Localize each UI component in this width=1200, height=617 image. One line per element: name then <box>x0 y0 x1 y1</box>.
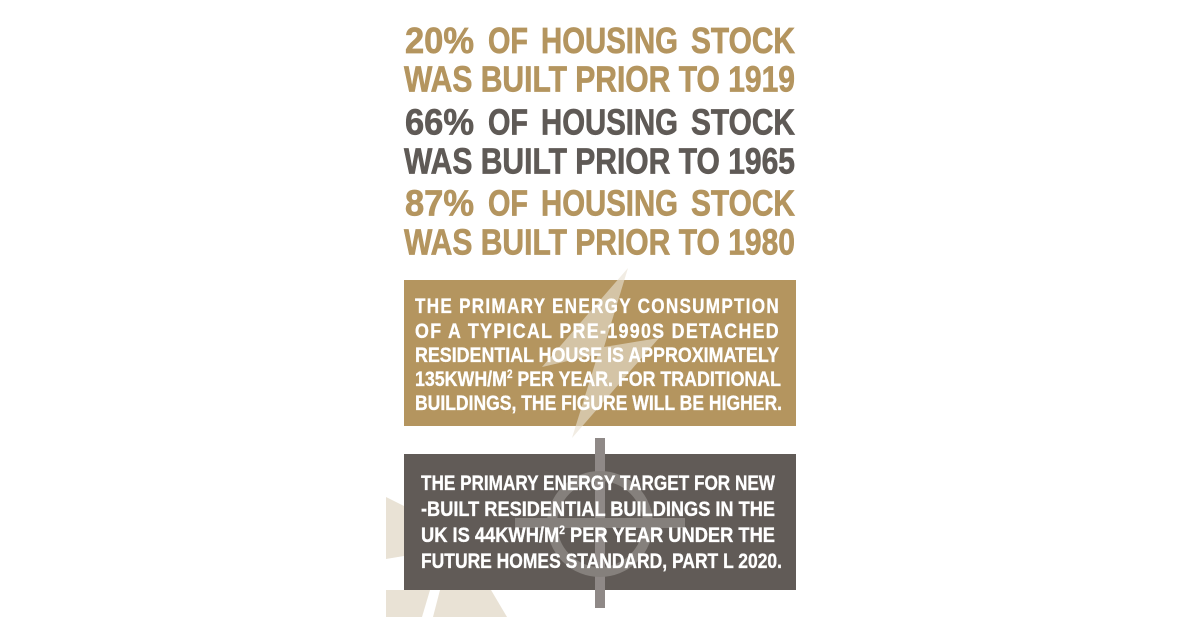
heading: 66% of housing stock <box>404 102 796 182</box>
heading: 20% of housing stock <box>404 20 796 100</box>
heading: 66% of housing stock: OF <box>488 102 528 142</box>
panel: primary energy consumption <box>404 268 796 438</box>
heading: 87% of housing stock: STOCK <box>691 182 796 224</box>
text: consumption statement: 2 <box>507 367 513 381</box>
text: consumption statement: RESIDENTIAL HOUSE IS APPROXIMATELY <box>415 343 779 367</box>
heading: 20% of housing stock: HOUSING <box>541 20 678 61</box>
text: consumption statement <box>415 294 782 415</box>
heading: 66% of housing stock: STOCK <box>691 102 796 142</box>
text: consumption statement: THE PRIMARY ENERGY CONSUMPTION <box>415 294 780 318</box>
heading: 87% of housing stock: 87% <box>405 182 474 224</box>
text: target statement: THE PRIMARY ENERGY TARGET FOR NEW <box>421 471 776 495</box>
heading: 87% of housing stock: WAS BUILT PRIOR TO 1980 <box>404 222 795 262</box>
text: target statement: 2 <box>559 523 565 537</box>
heading: 20% of housing stock: STOCK <box>691 20 796 61</box>
heading: 66% of housing stock: 66% <box>405 102 474 142</box>
graphic: beige house fragment <box>386 497 507 617</box>
text: target statement: -BUILT RESIDENTIAL BUILDINGS IN THE <box>421 497 775 521</box>
heading: 87% of housing stock: OF <box>488 182 528 224</box>
text: target statement <box>421 471 782 573</box>
text: consumption statement: PER YEAR. FOR TRADITIONAL <box>512 367 781 391</box>
text: target statement: PER YEAR UNDER THE <box>565 523 775 547</box>
text: target statement: FUTURE HOMES STANDARD, PART L 2020. <box>421 549 782 573</box>
text: consumption statement: OF A TYPICAL PRE-1990S DETACHED <box>415 319 780 343</box>
heading: 20% of housing stock: WAS BUILT PRIOR TO 1919 <box>404 58 795 100</box>
heading: 66% of housing stock: WAS BUILT PRIOR TO 1965 <box>404 140 795 182</box>
heading: 66% of housing stock: HOUSING <box>541 102 678 142</box>
heading: 20% of housing stock: 20% <box>405 20 474 61</box>
icon: crosshair target <box>515 438 685 608</box>
panel: primary energy target <box>404 438 796 608</box>
text: target statement: UK IS 44KWH/M <box>421 523 583 547</box>
text: consumption statement: BUILDINGS, THE FIGURE WILL BE HIGHER. <box>415 391 782 415</box>
heading: 20% of housing stock: OF <box>488 20 528 61</box>
text: consumption statement: 135KWH/M <box>415 367 526 391</box>
heading: 87% of housing stock: HOUSING <box>541 182 678 224</box>
icon: lightning bolt <box>542 268 659 438</box>
heading: 87% of housing stock <box>404 182 796 262</box>
